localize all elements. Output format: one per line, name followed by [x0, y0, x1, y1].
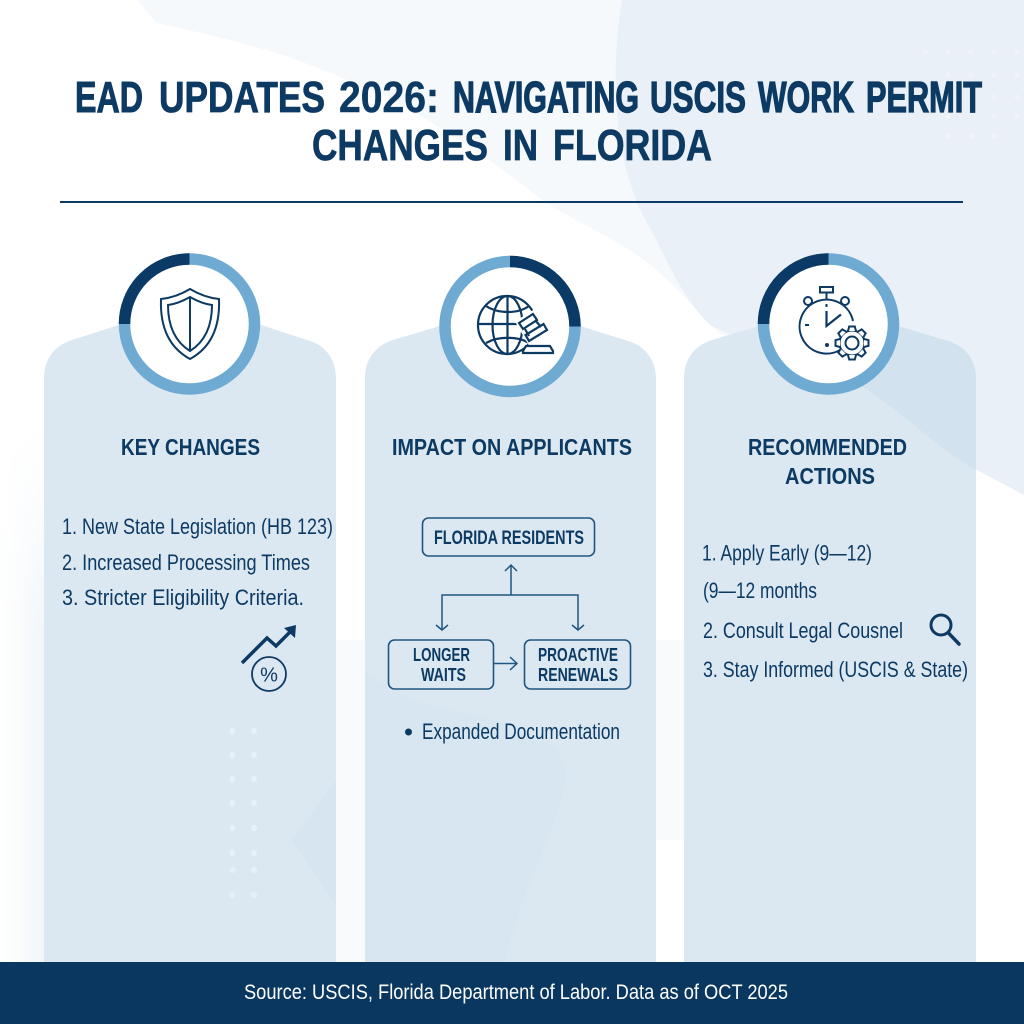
- footer: Source: USCIS, Florida Department of Labor. Data as of OCT 2025: [244, 980, 788, 1004]
- list: key changes: 2. Increased Processing Times: [62, 550, 310, 575]
- box: proactive renewals: [524, 640, 630, 689]
- box: florida residents: FLORIDA RESIDENTS: [434, 528, 584, 549]
- box: longer waits: WAITS: [421, 664, 466, 685]
- icon: rising trend with percent: [242, 625, 296, 691]
- icon: stopwatch with gear: [800, 287, 868, 360]
- list: recommended actions: 1. Apply Early (9—12): [702, 540, 872, 566]
- list: key changes: 3. Stricter Eligibility Criteria.: [62, 585, 304, 610]
- flow diagram: [388, 518, 630, 689]
- box: longer waits: LONGER: [413, 644, 470, 665]
- icon: globe and gavel: [478, 296, 553, 354]
- ring: impact: [445, 262, 575, 392]
- box: longer waits: [388, 640, 494, 689]
- title: IN: [503, 121, 538, 170]
- heading: impact: IMPACT ON APPLICANTS: [392, 434, 632, 460]
- icon: shield: [161, 289, 219, 359]
- list: recommended actions: [702, 540, 968, 682]
- ring: recommended actions: [764, 259, 894, 389]
- icon: rising trend with percent: %: [260, 664, 278, 686]
- heading: recommended actions: ACTIONS: [785, 463, 875, 489]
- panel: key changes: [44, 259, 336, 962]
- box: florida residents: [422, 518, 594, 556]
- title: 2026:: [339, 73, 439, 122]
- list: recommended actions: 2. Consult Legal Cousnel: [703, 618, 903, 643]
- icon: magnifier: [931, 615, 959, 644]
- title: WORK: [758, 73, 854, 122]
- box: proactive renewals: RENEWALS: [538, 664, 618, 685]
- title: CHANGES: [312, 121, 488, 170]
- list: key changes: 1. New State Legislation (HB 123): [62, 514, 333, 539]
- panel: impact on applicants: [365, 262, 656, 962]
- title: NAVIGATING: [453, 73, 639, 122]
- bullet: expanded documentation: Expanded Documentation: [422, 719, 620, 744]
- heading: recommended actions: [748, 434, 907, 489]
- ring: key changes: [124, 259, 254, 389]
- heading: key changes: KEY CHANGES: [121, 434, 260, 460]
- title: UPDATES: [159, 73, 325, 122]
- title: [75, 73, 982, 170]
- heading: recommended actions: RECOMMENDED: [748, 434, 907, 460]
- list: recommended actions: (9—12 months: [703, 578, 817, 603]
- panel: recommended actions: [684, 259, 976, 962]
- title: FLORIDA: [553, 121, 712, 170]
- footer: [0, 962, 1024, 1024]
- title: EAD: [75, 73, 143, 122]
- title: USCIS: [650, 73, 746, 122]
- connector arrows: [436, 565, 584, 670]
- box: proactive renewals: PROACTIVE: [538, 644, 618, 665]
- list: key changes: [62, 514, 333, 610]
